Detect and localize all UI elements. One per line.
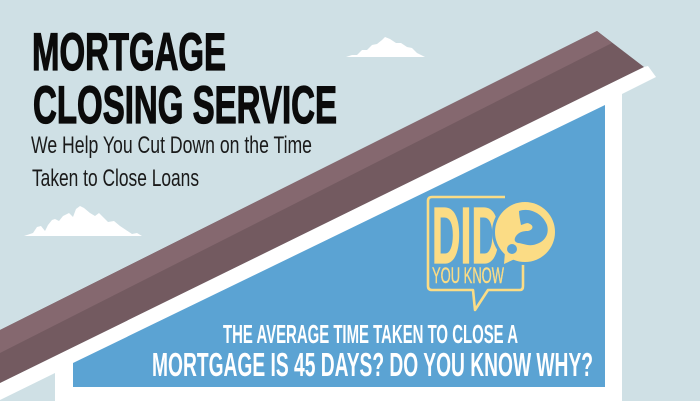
bubble outline: [428, 197, 523, 310]
roof: light ridge: [0, 31, 612, 353]
cloud: upper: [346, 37, 425, 57]
icon: did you know speech bubble: DID: [432, 191, 500, 280]
title: CLOSING SERVICE: [33, 76, 337, 135]
subtitle: Taken to Close Loans: [32, 165, 199, 192]
blue question mark: [515, 210, 548, 245]
subtitle: [31, 132, 312, 192]
house wall and eave: [0, 66, 656, 401]
title: MORTGAGE: [32, 23, 226, 82]
question mark dot: [507, 244, 517, 254]
subtitle: We Help You Cut Down on the Time: [31, 132, 312, 159]
YOU KNOW lettering: YOU KNOW: [432, 263, 504, 288]
icon: did you know speech bubble: [428, 191, 558, 310]
callout text: [152, 319, 593, 383]
cloud: lower left: [24, 206, 142, 236]
question mark circle: [492, 199, 558, 265]
title: [32, 23, 337, 135]
blue house panel: [73, 105, 605, 387]
